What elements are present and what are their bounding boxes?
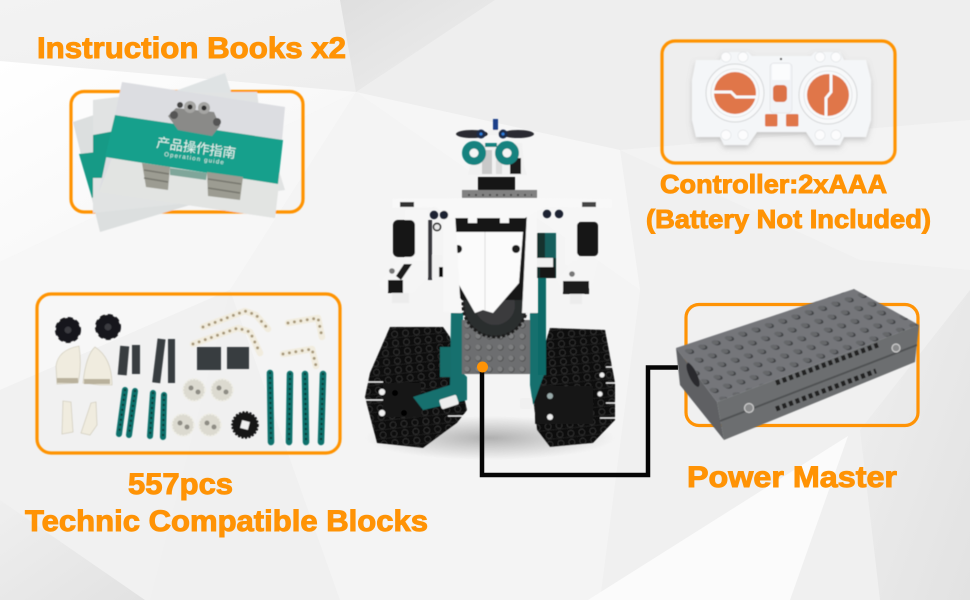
shoulder beam [392,198,612,223]
frame: power master [686,304,918,426]
black gear [463,273,527,337]
left stick disc [712,72,758,114]
dark torso [452,217,537,300]
white gears [172,379,233,436]
right track [533,328,615,447]
panel: controller [662,41,895,163]
cover text: 产品操作指南 [156,135,237,161]
orange buttons [765,114,798,126]
label: parts count: 557pcs [128,468,233,501]
connector dot [477,362,488,372]
remote body [692,52,871,145]
side columns [443,212,537,313]
back sheet [150,73,232,110]
teal chassis [413,313,545,410]
panel: instruction books [71,73,303,232]
sensor [439,394,532,410]
white shells [56,346,112,435]
frame: parts [37,294,340,453]
left arm [378,210,443,303]
robot [365,119,615,460]
shell bases [57,378,110,384]
cover robot: tank tracks [142,163,243,200]
label: battery note: (Battery Not Included) [646,204,931,234]
book C cover [99,82,285,218]
teal strut [537,233,556,375]
panel: power master [676,289,919,440]
battery box [676,289,919,440]
right stick disc [807,73,849,117]
connector line from robot to power master [482,367,678,475]
grey stud plate [462,320,530,374]
black gear [232,412,258,438]
cover subtitle: Operation guide [164,152,225,166]
beam holes [119,373,323,442]
head [456,119,534,175]
ground shadow [365,416,615,460]
label: power master: Power Master [687,461,897,494]
frame: controller [662,41,895,163]
long teal beams [270,373,323,442]
left track [365,327,467,448]
neck plate [462,177,537,198]
book B [93,92,285,213]
cover robot: head [168,101,221,136]
dark plates [118,339,249,383]
centre slider [770,58,792,113]
bent beam holes [193,311,322,366]
panel: parts [37,294,340,453]
chest panel [454,232,523,313]
label: controller: Controller:2xAAA [660,169,887,199]
black hubs [56,315,120,342]
right arm [540,210,598,304]
short teal beams [119,390,164,437]
label: blocks: Technic Compatible Blocks [25,505,428,538]
title: instruction books: Instruction Books x2 [37,32,346,65]
book A [73,113,190,232]
white bent beams [193,311,322,366]
frame: instruction books [71,92,303,212]
